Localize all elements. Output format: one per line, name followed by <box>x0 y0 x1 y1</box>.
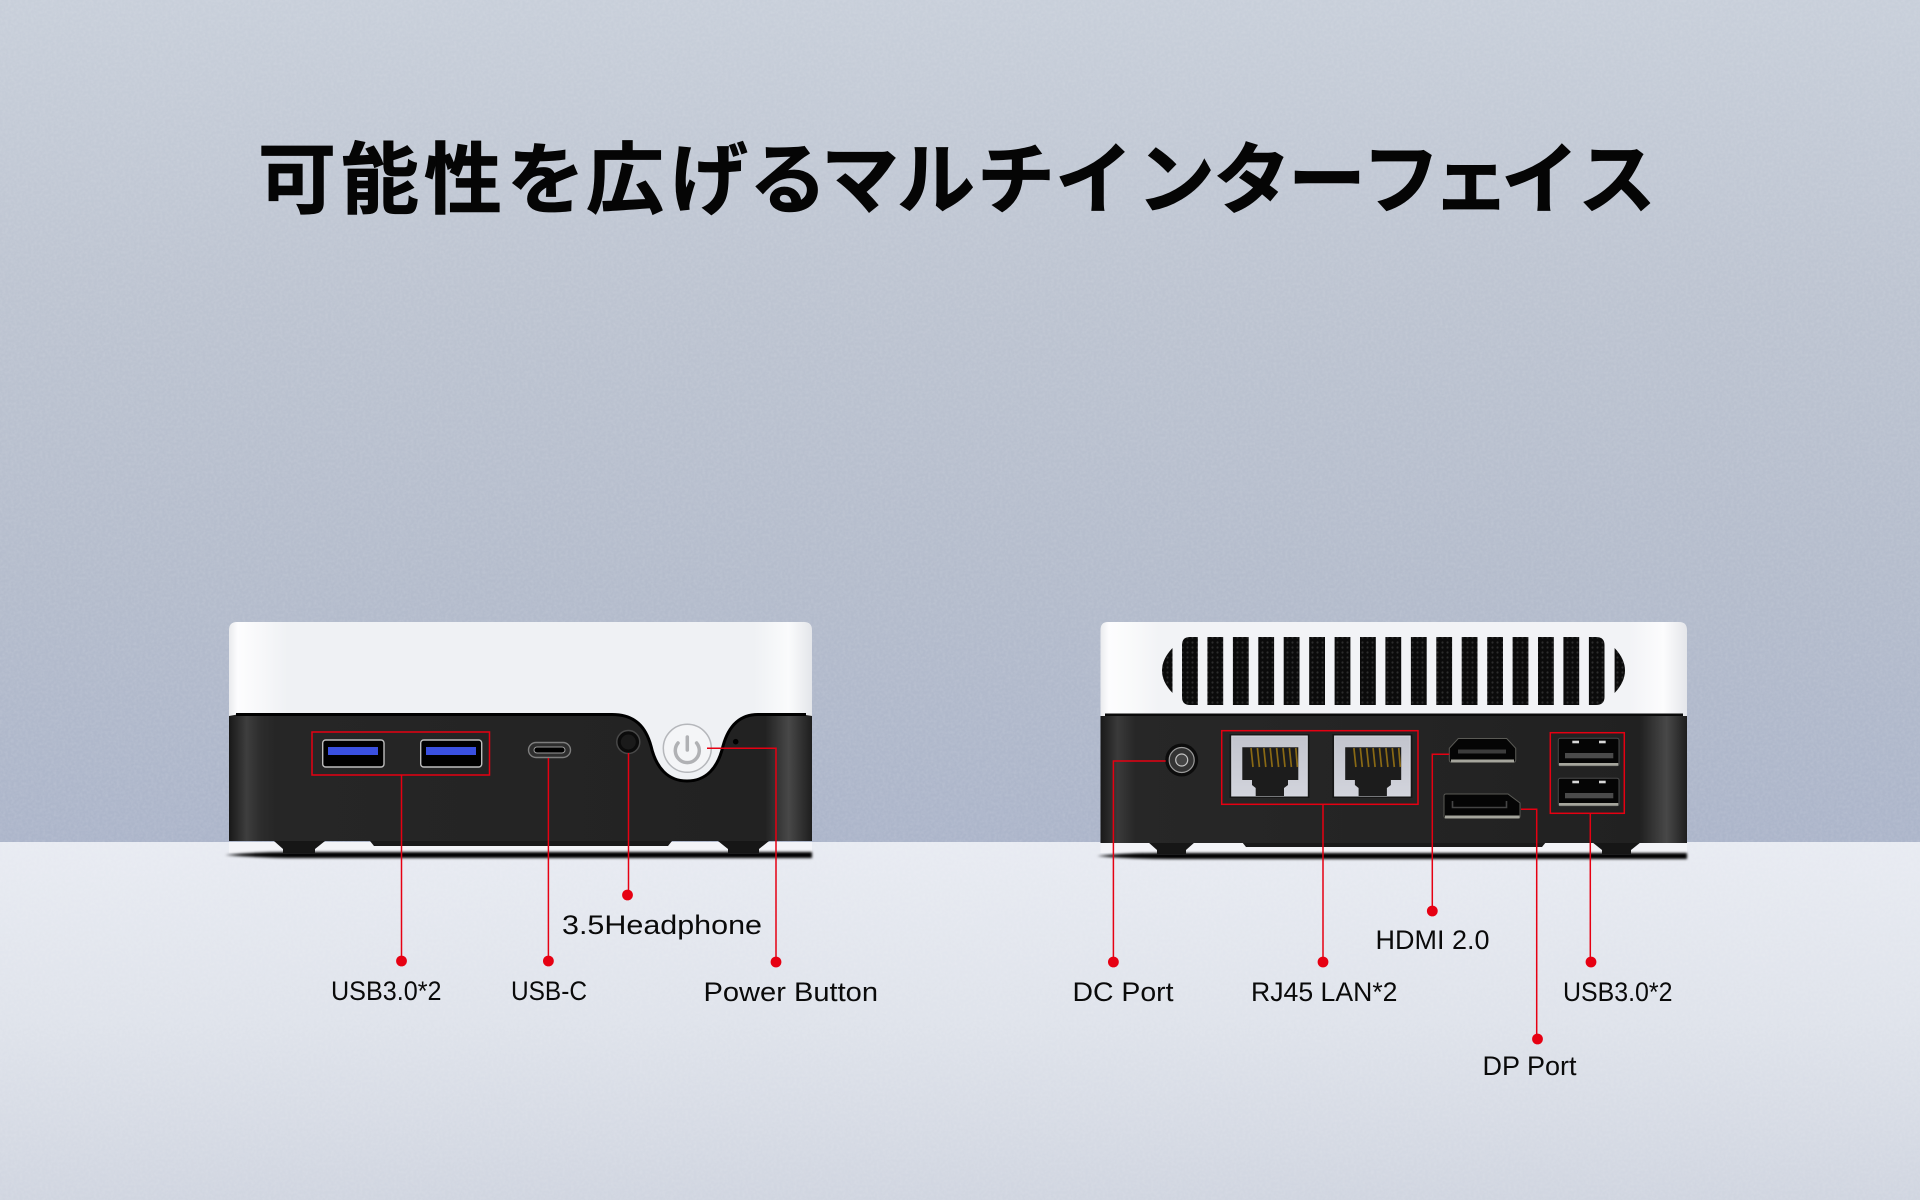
RJ45 port 2 <box>1332 734 1412 798</box>
shadow under front device <box>225 842 812 858</box>
label: DC Port: DC Port <box>1072 977 1174 1007</box>
label: 3.5Headphone: 3.5Headphone <box>562 910 762 940</box>
callout line: USB3.0*2 front <box>396 775 407 966</box>
power button <box>663 724 711 772</box>
front black base <box>229 714 812 841</box>
back feet <box>1148 842 1641 854</box>
shadow under back device <box>1097 843 1687 859</box>
USB 3.0 back port 1 <box>1558 738 1619 766</box>
callout box: USB3.0*2 back <box>1550 733 1624 813</box>
front feet <box>274 841 769 853</box>
label: USB-C: USB-C <box>511 976 587 1006</box>
label: USB3.0*2 front: USB3.0*2 <box>331 976 442 1006</box>
front base top edge <box>236 714 806 781</box>
panel: front of mini PC <box>225 622 812 967</box>
DisplayPort <box>1444 794 1520 818</box>
headphone jack <box>617 730 640 754</box>
label: HDMI 2.0: HDMI 2.0 <box>1376 925 1490 955</box>
callout line: HDMI <box>1427 754 1449 916</box>
power LED <box>733 739 738 744</box>
back black base <box>1100 716 1687 843</box>
front white top case <box>229 622 812 790</box>
label: DP Port: DP Port <box>1482 1051 1577 1081</box>
callout line: USB3.0*2 back <box>1586 813 1596 967</box>
HDMI port <box>1449 738 1516 762</box>
vent grille <box>1162 637 1625 705</box>
title: 可能性を広げるマルチインターフェイス <box>258 136 1656 224</box>
callout line: DC port <box>1108 761 1166 967</box>
callout line: DP <box>1521 809 1543 1044</box>
label: Power Button: Power Button <box>704 977 878 1007</box>
DC jack <box>1165 744 1198 776</box>
back white top case <box>1100 622 1687 725</box>
label: RJ45 LAN*2: RJ45 LAN*2 <box>1251 977 1398 1007</box>
callout box: USB3.0*2 front <box>312 732 490 775</box>
USB 3.0 back port 2 <box>1558 778 1619 806</box>
USB 3.0 port 2 <box>421 740 482 767</box>
RJ45 port 1 <box>1230 734 1310 798</box>
panel: back of mini PC <box>1097 622 1687 1044</box>
USB 3.0 port 1 <box>323 740 384 767</box>
callout line: USB-C <box>543 758 554 966</box>
callout line: power button <box>707 748 781 967</box>
USB-C port <box>528 742 570 758</box>
label: USB3.0*2 back: USB3.0*2 <box>1563 977 1672 1007</box>
callout line: headphone <box>622 753 633 900</box>
callout line: RJ45 <box>1318 804 1328 967</box>
callout box: RJ45 <box>1222 731 1418 804</box>
